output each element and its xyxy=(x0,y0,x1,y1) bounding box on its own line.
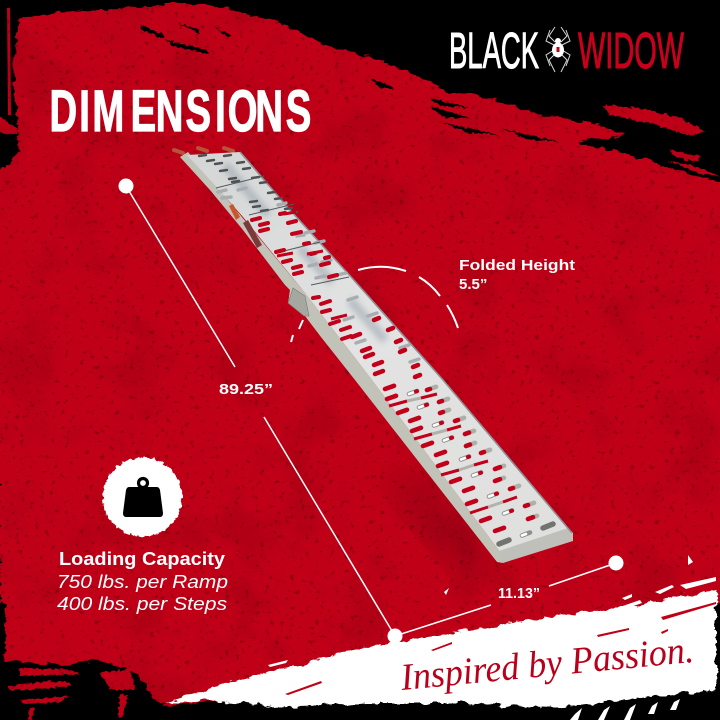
divider bars xyxy=(277,212,517,513)
loading capacity text: 750 lbs. per Ramp xyxy=(57,572,228,592)
side rail xyxy=(180,152,503,563)
width measure line xyxy=(395,556,624,636)
middle hole red marks xyxy=(416,391,512,511)
right edge highlight xyxy=(240,152,572,533)
ramp deck xyxy=(187,152,572,552)
red streaks on white xyxy=(285,602,716,695)
upper red cut-out slots xyxy=(252,213,351,339)
middle red cut-out slots xyxy=(352,318,420,377)
white flecks on red xyxy=(268,555,716,676)
length measure line xyxy=(118,178,402,644)
folding ramp xyxy=(174,148,573,563)
loading capacity text: 400 lbs. per Steps xyxy=(57,594,227,614)
lower red slots: right column xyxy=(427,389,533,519)
end row dark slots xyxy=(499,524,553,544)
middle hole slots xyxy=(409,391,530,536)
middle hole highlights xyxy=(409,392,526,536)
brand word: black: BLACK xyxy=(449,22,539,79)
brand logo xyxy=(449,22,684,79)
folded height label xyxy=(459,257,575,293)
icon: weight badge xyxy=(103,458,182,536)
folded height dashed arc xyxy=(291,267,458,342)
hook tips xyxy=(174,148,233,153)
white jagged fringe xyxy=(570,699,680,720)
loading capacity text: Loading Capacity xyxy=(59,549,225,569)
warning sticker xyxy=(229,204,240,220)
safety label xyxy=(243,220,262,248)
hinge bracket xyxy=(288,288,309,316)
icon: spider xyxy=(546,27,570,72)
length label: 89.25” xyxy=(219,382,273,398)
loading capacity text xyxy=(57,549,228,614)
folded height label: Folded Height xyxy=(459,257,575,274)
title: DIMENSIONS xyxy=(50,80,311,144)
ramp shadow xyxy=(378,457,502,593)
upper section silver marks xyxy=(218,188,419,362)
deck mottling xyxy=(225,165,385,340)
upper section seams xyxy=(216,176,349,285)
upper section dark slots xyxy=(199,155,297,213)
tagline: Inspired by Passion. xyxy=(398,629,696,699)
folded height label: 5.5” xyxy=(459,276,487,293)
lower red slots: left column xyxy=(385,386,504,531)
white brush stroke band xyxy=(165,555,716,720)
divider silver segments xyxy=(407,398,503,507)
end lip xyxy=(499,528,573,563)
lower silver slots: right column xyxy=(427,387,537,519)
width label: 11.13” xyxy=(498,586,540,602)
